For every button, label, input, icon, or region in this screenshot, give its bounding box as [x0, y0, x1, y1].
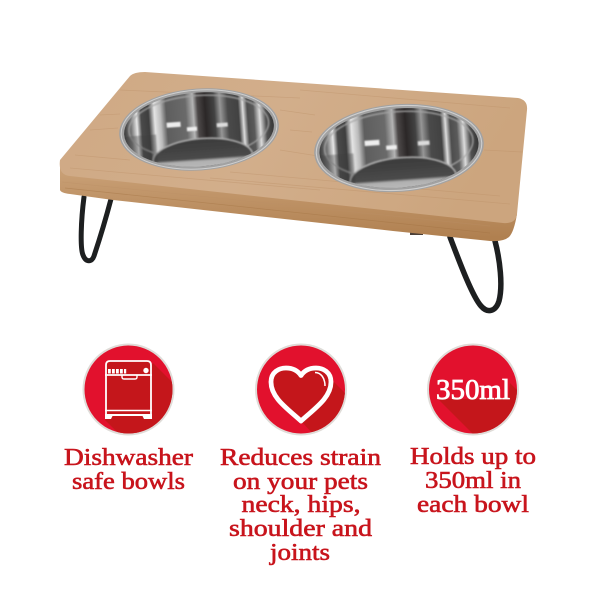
caption: reduces strain [220, 445, 381, 566]
left hairpin leg [81, 197, 111, 261]
long shadow [438, 383, 517, 434]
bowl: right [311, 98, 487, 206]
caption: reduces strain: neck, hips, [242, 492, 360, 518]
wooden board top [60, 72, 527, 223]
caption: dishwasher: Dishwasher [64, 445, 193, 471]
caption: reduces strain: joints [269, 540, 330, 566]
caption: capacity: each bowl [417, 492, 529, 518]
caption: dishwasher: safe bowls [72, 469, 185, 495]
caption: reduces strain: Reduces strain [220, 445, 381, 471]
icon: dishwasher badge [82, 344, 174, 436]
caption: dishwasher [64, 445, 193, 495]
right hairpin leg [450, 237, 501, 311]
caption: reduces strain: on your pets [233, 469, 368, 495]
icon: heart badge [255, 344, 347, 436]
icon: 350ml badge [427, 344, 519, 436]
heart highlight [315, 372, 325, 386]
bowl: left [116, 83, 282, 184]
product: raised pet feeder [60, 72, 527, 311]
wood grain [62, 90, 522, 233]
heart glyph [271, 368, 331, 421]
long shadow [105, 363, 172, 434]
dishwasher glyph [105, 361, 152, 419]
wooden board front edge [60, 160, 517, 241]
caption: reduces strain: shoulder and [229, 516, 372, 542]
caption: capacity [410, 444, 536, 518]
350ml label: 350ml [436, 375, 510, 406]
foot pad under board [410, 230, 423, 235]
caption: capacity: Holds up to [410, 444, 536, 470]
caption: capacity: 350ml in [425, 468, 521, 494]
long shadow [302, 382, 345, 432]
